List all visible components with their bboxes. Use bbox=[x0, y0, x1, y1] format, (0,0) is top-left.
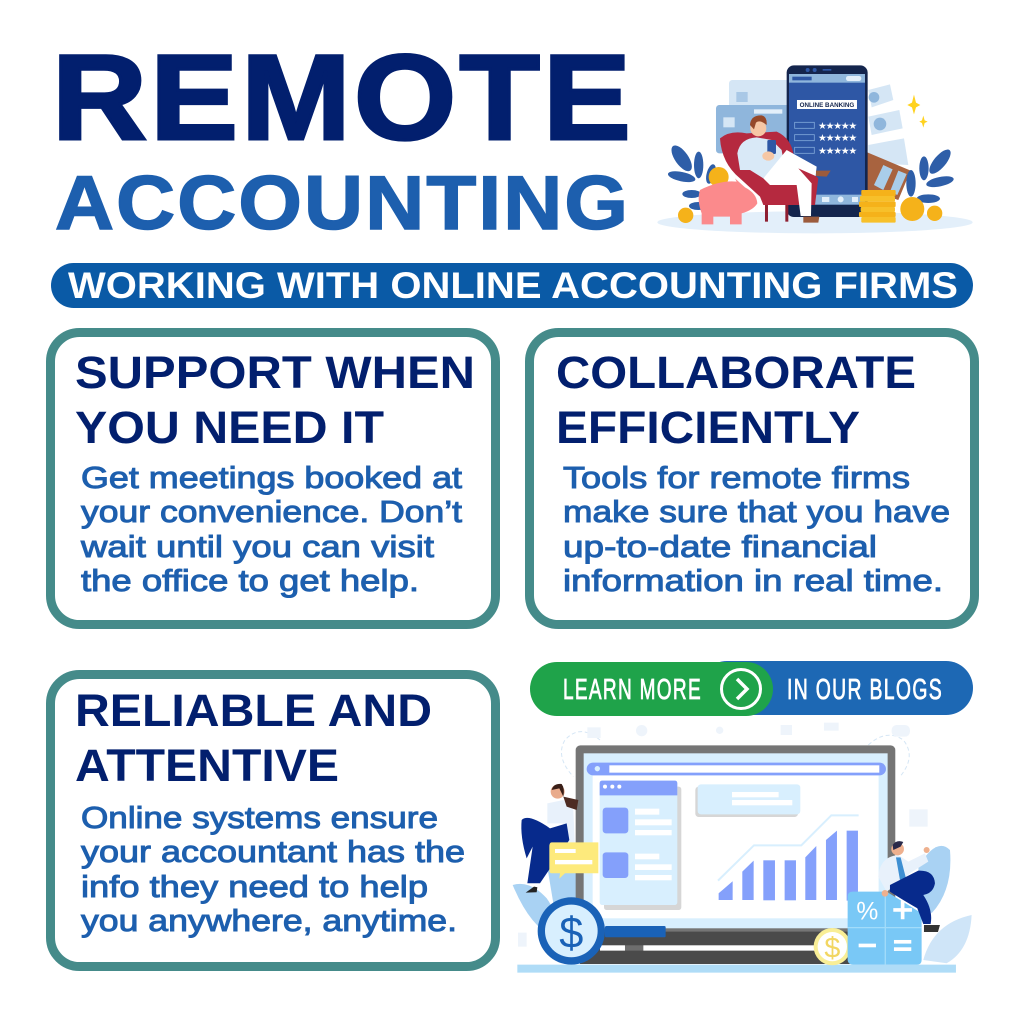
piggy bank bbox=[699, 167, 757, 224]
phone: ★★★★★ bbox=[819, 121, 858, 130]
info card bbox=[695, 784, 800, 817]
body text: your accountant has the bbox=[81, 834, 465, 869]
body text: info they need to help bbox=[81, 869, 428, 904]
body text: information in real time. bbox=[563, 563, 943, 598]
app window bbox=[600, 781, 681, 910]
heading: RELIABLE AND bbox=[75, 685, 432, 736]
body text: Get meetings booked at bbox=[81, 460, 462, 495]
phone bbox=[787, 65, 868, 217]
button: learn more in our blogs: LEARN MORE bbox=[563, 674, 702, 706]
phone: ★★★★★ bbox=[819, 146, 858, 155]
bar chart bbox=[718, 815, 859, 901]
heading: YOU NEED IT bbox=[75, 402, 384, 453]
phone: ★★★★★ bbox=[819, 134, 858, 143]
coin: $ bbox=[824, 932, 840, 964]
magnifier: $ bbox=[559, 909, 583, 957]
coins bbox=[678, 190, 942, 223]
calculator: % bbox=[856, 898, 878, 925]
armchair bbox=[720, 132, 818, 205]
illustration: online banking bbox=[657, 65, 973, 233]
heading bbox=[75, 347, 475, 453]
title: REMOTE: REMOTE bbox=[52, 29, 634, 165]
body text: Online systems ensure bbox=[81, 800, 438, 835]
body text bbox=[563, 460, 950, 598]
heading: SUPPORT WHEN bbox=[75, 347, 475, 398]
body text: wait until you can visit bbox=[80, 529, 434, 564]
heading bbox=[75, 685, 432, 791]
woman bbox=[521, 784, 578, 893]
body text: the office to get help. bbox=[81, 563, 419, 598]
body text bbox=[81, 800, 465, 938]
laptop bbox=[517, 745, 956, 973]
magnifier bbox=[538, 897, 666, 965]
body text: you anywhere, anytime. bbox=[81, 903, 457, 938]
chat bubble bbox=[549, 842, 598, 879]
panel: reliable and attentive bbox=[50, 674, 496, 966]
calculator bbox=[848, 892, 922, 965]
panel: support when you need it bbox=[50, 332, 496, 624]
subtitle: ACCOUNTING: ACCOUNTING bbox=[55, 161, 630, 246]
body text bbox=[80, 460, 462, 598]
heading: COLLABORATE bbox=[556, 347, 916, 398]
leaves bbox=[513, 846, 972, 963]
man on calculator bbox=[878, 841, 940, 932]
heading bbox=[556, 347, 916, 453]
heading: ATTENTIVE bbox=[75, 740, 339, 791]
body text: Tools for remote firms bbox=[563, 460, 910, 495]
illustration: laptop with growth chart bbox=[513, 723, 972, 973]
button: learn more in our blogs: IN OUR BLOGS bbox=[787, 674, 943, 706]
phone: ONLINE BANKING bbox=[800, 103, 855, 109]
button: learn more in our blogs bbox=[530, 661, 973, 716]
heading: EFFICIENTLY bbox=[556, 402, 860, 453]
body text: up-to-date financial bbox=[563, 529, 877, 564]
body text: make sure that you have bbox=[563, 494, 950, 529]
banner: working with online accounting firms: WORKING WITH ONLINE ACCOUNTING FIRMS bbox=[68, 265, 958, 306]
coin bbox=[814, 928, 851, 965]
body text: your convenience. Don’t bbox=[81, 494, 462, 529]
leaves bbox=[667, 142, 955, 210]
man bbox=[737, 115, 831, 223]
panel: collaborate efficiently bbox=[530, 332, 974, 624]
